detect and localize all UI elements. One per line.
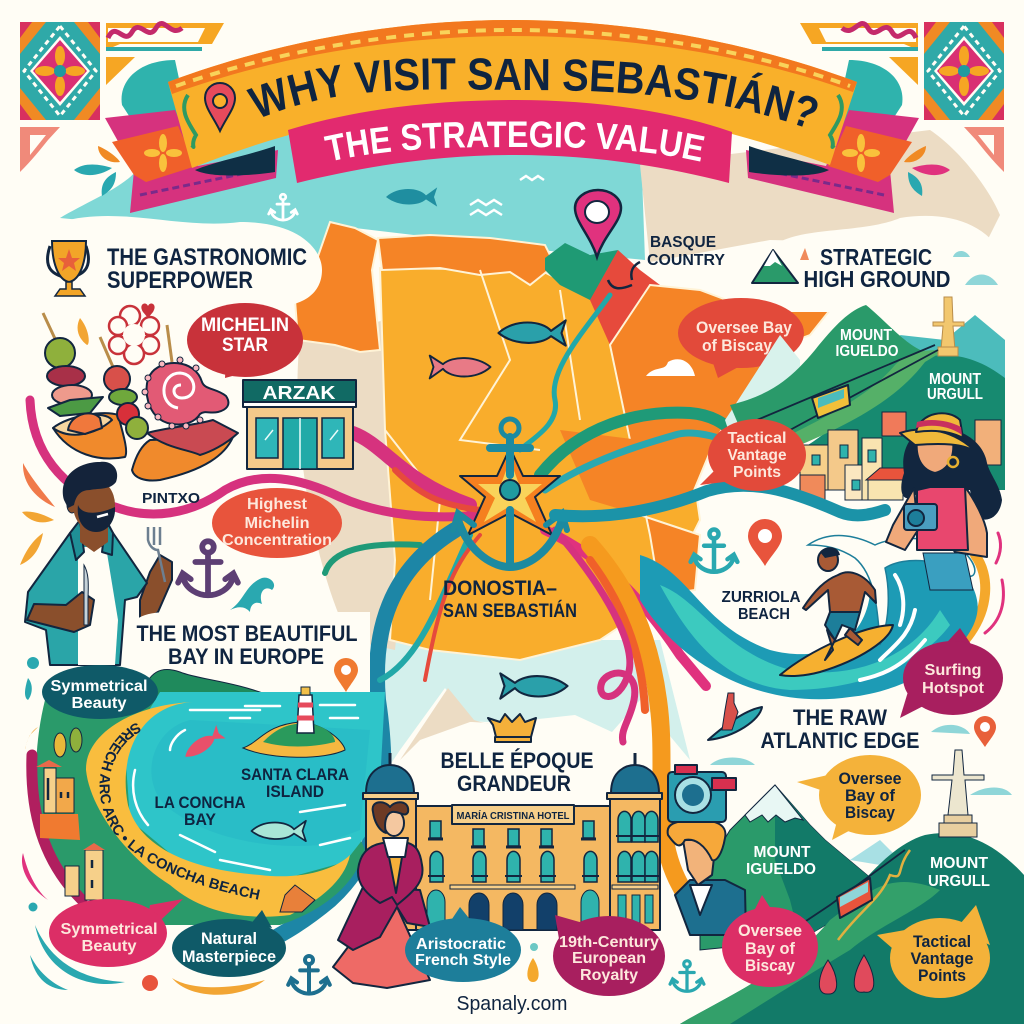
bubble: Oversee yellow: Bay of [845, 787, 895, 805]
icon: pink fish [181, 725, 226, 763]
backdrop: gastronomic heading [40, 216, 322, 306]
heading: Belle Époque [440, 748, 594, 796]
bay panel [26, 669, 385, 925]
heading: gastronomic [107, 244, 307, 294]
ribbon: pink left [30, 400, 480, 517]
label: Igueldo: IGUELDO [746, 861, 816, 878]
lady: hair [373, 802, 408, 833]
woman: jeans [923, 553, 973, 590]
right banner tail [746, 110, 919, 213]
lady in gown [333, 802, 430, 988]
hotel: left dome [366, 765, 414, 793]
Arzak restaurant: ARZAK [262, 383, 336, 403]
icon: red pin [748, 519, 782, 566]
heading: most beautiful bay: BAY IN EUROPE [168, 644, 324, 669]
woman: face [917, 440, 953, 473]
Arzak restaurant [243, 380, 356, 469]
lady: skirt [333, 907, 430, 988]
wave: inner teal [660, 585, 950, 690]
label: Igueldo: MOUNT [754, 844, 811, 861]
camera [668, 765, 736, 822]
crown [488, 714, 536, 742]
label: Santa Clara: ISLAND [266, 782, 324, 801]
sea decorations [269, 176, 544, 220]
man: knife [84, 565, 88, 625]
bubble: Tactical Vantage Points [700, 419, 806, 491]
bubble: Michelin star: STAR [222, 335, 268, 356]
bubble: Highest Michelin Concentration [212, 488, 342, 558]
mountains: snow [745, 785, 803, 822]
heading: gastronomic: SUPERPOWER [107, 267, 253, 294]
map: central yellow [380, 268, 700, 660]
label: Donostia: DONOSTIA– [443, 577, 557, 600]
bubble: Aristocratic French Style: French Style [415, 952, 511, 969]
right accents [965, 555, 985, 640]
icon: michelin flower [109, 304, 159, 364]
map: north-west [295, 222, 380, 352]
man: smile [97, 514, 108, 517]
heading backdrop: belle epoque [430, 725, 605, 810]
heading backdrop: bay [128, 612, 370, 692]
surfer [803, 547, 876, 660]
lighthouse [297, 695, 314, 733]
dot [530, 943, 538, 951]
bubble: Tactical yellow: Tactical [913, 933, 971, 951]
hotel: right dome [611, 765, 659, 793]
bay: inner water [151, 720, 370, 846]
mountains: Igueldo [730, 305, 925, 440]
bubble: Oversee yellow: Biscay [845, 804, 896, 822]
ribbon: red south [425, 535, 480, 680]
heading: strategic high ground: HIGH GROUND [804, 266, 950, 292]
bubble: Tactical yellow: Points [918, 967, 966, 985]
emblem: star [460, 448, 560, 535]
pintxo: left [43, 313, 172, 458]
bubble: Symmetrical Beauty top [42, 665, 158, 719]
bubble: Highest Michelin Concentration: Highest [247, 496, 307, 513]
ribbon: pink from Arzak [353, 433, 470, 505]
man: face [683, 840, 716, 885]
ribbon: orange [590, 545, 750, 952]
label: Igueldo [746, 844, 816, 878]
heading: strategic high ground [804, 244, 950, 292]
label: Urgull [927, 371, 983, 403]
label: La Concha Bay: LA CONCHA [154, 793, 246, 812]
upper right mountains [725, 297, 1005, 500]
icon: white anchor [269, 194, 297, 220]
label: Igueldo: IGUELDO [836, 343, 898, 360]
icon: pale fish [252, 821, 306, 841]
ribbon: green swirl [325, 544, 420, 573]
heading: Belle Époque: GRANDEUR [457, 771, 571, 796]
man: shirt [25, 533, 147, 665]
teal blob right [834, 60, 902, 130]
bubble: Aristocratic French Style: Aristocratic [416, 936, 506, 953]
icon: teal anchor [691, 530, 737, 572]
hotel: main block [415, 806, 610, 930]
heading: most beautiful bay [136, 621, 358, 669]
map of Spain [295, 222, 830, 660]
bubble: Highest Michelin Concentration: Michelin [244, 515, 310, 532]
island [243, 687, 345, 757]
label: Donostia: SAN SEBASTIÁN [443, 600, 577, 622]
bubble: Symmetrical Beauty pink [49, 899, 183, 967]
lady: jacket [358, 843, 423, 905]
man: suit [675, 880, 746, 935]
map: basque red [590, 250, 660, 345]
label: Basque Country [647, 234, 726, 269]
subtitle text: THE STRATEGIC VALUE [324, 121, 705, 162]
heading: raw atlantic edge [760, 705, 920, 753]
bubble: Symmetrical Beauty top: Symmetrical [50, 678, 148, 695]
ribbon: pink south east [545, 530, 706, 686]
ribbon: bay teal [262, 530, 455, 945]
label: Urgull: URGULL [927, 386, 983, 403]
mountains: pale shore [725, 335, 800, 480]
lower-left confetti [30, 925, 125, 990]
bubble: Oversee Bay of Biscay [678, 298, 804, 378]
cable lines [745, 345, 938, 430]
heading: raw atlantic edge: THE RAW [793, 705, 887, 730]
man: hair [63, 462, 117, 508]
pintxo: skewer [104, 366, 148, 439]
beach label text: SREECH ARC ARC • LA CONCHA BEACH [100, 723, 260, 900]
label: Donostia [443, 577, 577, 622]
ribbon: north teal [520, 295, 610, 450]
heading: gastronomic: THE GASTRONOMIC [107, 244, 307, 271]
man: head [73, 479, 115, 531]
sea [60, 120, 645, 300]
teal anchor lower [670, 961, 704, 991]
clouds [710, 725, 1012, 795]
wave: foam [860, 575, 925, 680]
statue [933, 297, 964, 356]
bubble: 19th-Century: European [572, 950, 646, 967]
bubble: Tactical Vantage Points: Vantage [728, 447, 787, 464]
cable line [800, 850, 905, 925]
bubble: Symmetrical Beauty pink: Symmetrical [60, 921, 158, 938]
man: shirt [690, 885, 712, 915]
bubble: Aristocratic French Style [405, 907, 521, 982]
trophy [48, 241, 88, 296]
bubble: Symmetrical Beauty top: Beauty [72, 695, 127, 712]
bubble: 19th-Century [553, 915, 665, 996]
lower sea [370, 640, 690, 780]
label: Santa Clara [241, 765, 349, 801]
hotel María Cristina [363, 753, 662, 930]
woman: top [917, 487, 968, 550]
man: hair [668, 821, 725, 860]
label: Urgull [928, 855, 990, 890]
bubble: Natural Masterpiece: Masterpiece [182, 948, 276, 966]
lady: face [384, 810, 404, 836]
orange arc [172, 978, 265, 995]
label: pintxo: PINTXO [142, 490, 200, 507]
mountains: lime [680, 882, 940, 1024]
title banner [168, 20, 857, 168]
emblem: star inner [478, 460, 542, 522]
portugal [297, 320, 400, 650]
mountains: pale peak [850, 840, 910, 870]
leader [608, 262, 640, 288]
woman: hat [900, 413, 977, 453]
hotel: sign [452, 805, 574, 824]
heading: most beautiful bay: THE MOST BEAUTIFUL [136, 621, 358, 646]
corner tiles left [20, 22, 224, 172]
bay: crimson edge [32, 755, 82, 900]
mountains: lime path [780, 350, 945, 445]
hotel: windows [428, 811, 660, 889]
lady: collar [383, 838, 408, 857]
woman: earring [948, 457, 958, 467]
hotel: doors [469, 893, 557, 930]
label: Basque Country: COUNTRY [647, 252, 726, 269]
hotel: arched windows ground [427, 890, 653, 925]
icon: location pin [205, 83, 235, 131]
woman: right arm [935, 487, 987, 557]
icon: purple anchor [178, 541, 238, 595]
lady: overskirt [338, 887, 430, 950]
trees [54, 728, 82, 757]
dots [142, 975, 158, 991]
left confetti [20, 318, 89, 912]
left banner tail [105, 110, 278, 213]
man: lower arm [27, 592, 94, 632]
corner tiles right [800, 22, 1004, 172]
right accents pink and teal [985, 533, 1003, 633]
header decoration [20, 22, 1004, 196]
tan south coast [400, 688, 490, 760]
cable car [812, 385, 850, 418]
bubble: Symmetrical Beauty pink: Beauty [82, 938, 137, 955]
label: Urgull: MOUNT [929, 371, 981, 388]
drops [527, 958, 539, 982]
bubble: Michelin star [187, 303, 303, 378]
bay: headland [140, 669, 277, 700]
heading: Belle Époque: BELLE ÉPOQUE [440, 748, 594, 773]
navy anchor [288, 956, 330, 994]
icon: top fish [386, 187, 437, 207]
map fish blue [498, 320, 566, 346]
central emblem [453, 419, 567, 567]
zurriola panel [640, 536, 985, 699]
label: Zurriola [722, 589, 800, 623]
ribbon: teal to town [555, 486, 885, 516]
man: neck [80, 522, 108, 552]
bubble: Oversee pink: Biscay [745, 957, 796, 975]
man with fork [25, 462, 172, 665]
map: lower orange [560, 430, 690, 515]
man: collar [70, 520, 113, 560]
heading: raw atlantic edge: ATLANTIC EDGE [760, 728, 920, 753]
label: Urgull: URGULL [928, 873, 990, 890]
wave: surfboard [780, 625, 893, 676]
lower right mountains [680, 750, 1024, 1024]
ribbon: teal south [380, 535, 470, 680]
mountains: Urgull [800, 355, 1005, 490]
icon: mountain [752, 248, 809, 283]
label: La Concha Bay [154, 793, 246, 829]
woman: left arm [886, 488, 918, 550]
ribbon: red west [395, 470, 480, 510]
waves [470, 176, 544, 215]
map fish pink [430, 356, 490, 378]
footer: Spanaly.com [456, 993, 568, 1015]
mountains: teal back [900, 315, 1005, 480]
cloud [646, 359, 695, 376]
town [800, 412, 1001, 500]
heading: strategic high ground: STRATEGIC [820, 244, 932, 270]
label: Zurriola: BEACH [738, 606, 790, 623]
cable car [837, 878, 872, 918]
backdrop: strategic heading [766, 216, 1005, 312]
subtitle banner [288, 100, 732, 183]
wave: crest [808, 536, 975, 645]
label: Urgull: MOUNT [930, 855, 988, 872]
title text: WHY VISIT SAN SEBASTIÁN? [246, 58, 818, 127]
man: beard [78, 505, 115, 532]
bubble: Tactical Vantage Points: Points [733, 464, 781, 481]
label: Santa Clara: SANTA CLARA [241, 765, 349, 784]
woman with camera [886, 413, 1002, 590]
village [36, 760, 105, 900]
bubble: Oversee yellow [797, 755, 921, 840]
ribbon: green east [540, 413, 745, 475]
hotel: left tower [366, 797, 416, 930]
bubble: Tactical Vantage Points: Tactical [728, 430, 786, 447]
bubble: Oversee yellow: Oversee [838, 770, 902, 788]
map: east orange [610, 285, 830, 595]
map fish south [500, 673, 568, 699]
hotel: right tower [610, 797, 660, 930]
lady: bodice [389, 857, 402, 893]
man: tee [78, 547, 118, 665]
woman: hair [901, 432, 1002, 520]
autumn leaves [280, 885, 315, 912]
mountains: Urgull [680, 833, 1024, 1024]
ribbon: teal east [545, 433, 725, 490]
statue [932, 750, 984, 837]
bubble: Surfing Hotspot: Surfing [924, 662, 982, 679]
bubble: Highest Michelin Concentration: Concentration [222, 532, 332, 549]
bubble: Natural Masterpiece: Natural [201, 930, 257, 948]
man: ear [67, 497, 77, 513]
bubble: 19th-Century: 19th-Century [559, 934, 659, 951]
emblem: anchor [453, 419, 567, 567]
splashes right [904, 146, 950, 196]
mini surfer [708, 693, 762, 740]
bubble: Michelin star: MICHELIN [201, 315, 289, 336]
trees [819, 955, 874, 994]
bubble: Oversee pink: Bay of [745, 940, 795, 958]
bubble: Tactical yellow: Vantage [910, 950, 974, 968]
bay: sea [125, 692, 385, 880]
bubble: Surfing Hotspot: Hotspot [922, 680, 985, 697]
icon: small pin [974, 716, 996, 747]
man with camera on head [668, 765, 746, 935]
hotel María Cristina: MARÍA CRISTINA HOTEL [456, 809, 570, 822]
woman: camera [904, 504, 937, 530]
bubble: Natural Masterpiece [172, 910, 286, 977]
banner swirls [184, 95, 842, 147]
label: Igueldo: MOUNT [840, 327, 892, 344]
icon: orange pin [334, 658, 358, 692]
man: raised arm [140, 555, 172, 625]
icon: wave [230, 578, 274, 612]
splashes left [74, 146, 120, 196]
teal blob left [122, 60, 190, 130]
label: La Concha Bay: BAY [184, 810, 217, 829]
wave: outer body [640, 555, 978, 699]
clouds [953, 251, 998, 285]
map: basque green [545, 243, 618, 300]
bubble: 19th-Century: Royalty [580, 967, 638, 984]
pintxo: octopus [132, 357, 238, 481]
bubble: Oversee Bay of Biscay: Oversee Bay [696, 318, 792, 337]
mountains: Igueldo [700, 785, 885, 950]
land: north-east France [640, 130, 1000, 262]
label: Zurriola: ZURRIOLA [722, 589, 800, 606]
label: Basque Country: BASQUE [650, 234, 716, 251]
ribbon network [30, 295, 750, 952]
ribbon: red orange [590, 560, 645, 710]
bubble: Surfing Hotspot [900, 628, 1003, 718]
label: Igueldo [836, 327, 898, 360]
map: north coast [378, 235, 555, 285]
bay: beach [86, 702, 350, 917]
ribbon: pink loop [555, 530, 635, 742]
bubble: Tactical yellow [877, 905, 990, 998]
bubble: Oversee pink: Oversee [738, 922, 802, 940]
bubble: Oversee Bay of Biscay: of Biscay [702, 336, 772, 355]
man: fork [148, 527, 165, 582]
bay: green land [36, 695, 365, 925]
big location pin [575, 190, 621, 257]
bubble: Oversee pink [722, 895, 818, 987]
